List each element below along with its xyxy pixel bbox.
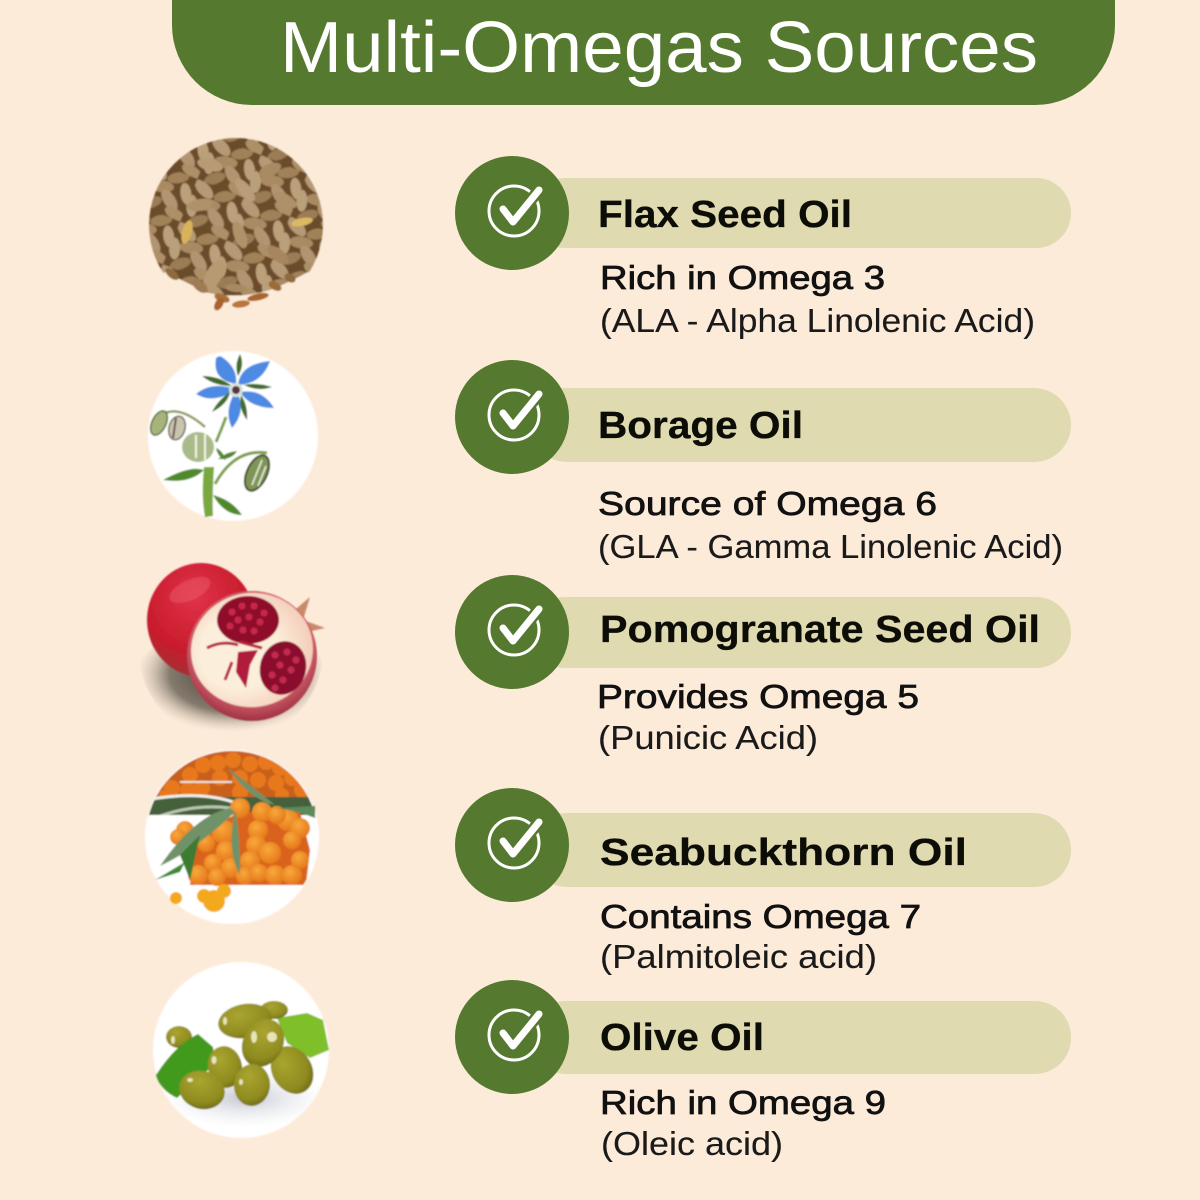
item: pomegranate seed oil (455, 575, 1071, 756)
item: seabuckthorn oil (455, 788, 1071, 975)
heading: Borage Oil (598, 405, 803, 447)
item: flax seed oil (455, 156, 1071, 339)
check badge (455, 360, 569, 474)
petals (196, 356, 274, 428)
heading: Flax Seed Oil (598, 194, 852, 236)
fallen berries (170, 884, 231, 912)
omega type: Provides Omega 5 (597, 678, 919, 715)
omega type: Rich in Omega 3 (600, 259, 885, 296)
buds (147, 408, 274, 494)
heading pill (530, 388, 1071, 462)
fatty acid: (Palmitoleic acid) (600, 938, 877, 975)
image: borage flower (147, 351, 318, 521)
heading: Seabuckthorn Oil (600, 832, 967, 874)
title: Multi-Omegas Sources (280, 8, 1038, 88)
leaves (155, 768, 315, 880)
check badge (455, 980, 569, 1094)
omega type: Rich in Omega 9 (600, 1084, 886, 1121)
header banner (172, 0, 1115, 105)
leaves (277, 1013, 329, 1058)
stems (153, 411, 267, 484)
heading: Olive Oil (600, 1017, 764, 1059)
image: sea buckthorn berries (144, 750, 320, 924)
image: pomegranate (136, 563, 328, 738)
sepals (202, 354, 272, 420)
item: borage oil (455, 360, 1071, 565)
heading pill (530, 597, 1071, 668)
image: green olives (153, 962, 330, 1138)
leaves (163, 448, 242, 515)
berries cluster (170, 798, 310, 886)
image: flax seeds (148, 137, 324, 312)
omega type: Source of Omega 6 (598, 485, 937, 522)
heading pill (530, 813, 1071, 887)
heading: Pomogranate Seed Oil (600, 609, 1040, 651)
check badge (455, 788, 569, 902)
fatty acid: (Punicic Acid) (598, 719, 818, 756)
heading pill (530, 1001, 1071, 1074)
check badge (455, 575, 569, 689)
seeds lower (207, 636, 312, 700)
olives (175, 1000, 322, 1114)
cut flesh (184, 585, 320, 715)
fatty acid: (GLA - Gamma Linolenic Acid) (598, 528, 1063, 565)
seeds upper (217, 596, 279, 644)
omega type: Contains Omega 7 (600, 898, 921, 935)
crown (290, 597, 325, 631)
item: olive oil (455, 980, 1071, 1162)
check badge (455, 156, 569, 270)
heading pill (530, 178, 1071, 248)
fatty acid: (Oleic acid) (601, 1125, 783, 1162)
fatty acid: (ALA - Alpha Linolenic Acid) (600, 302, 1035, 339)
